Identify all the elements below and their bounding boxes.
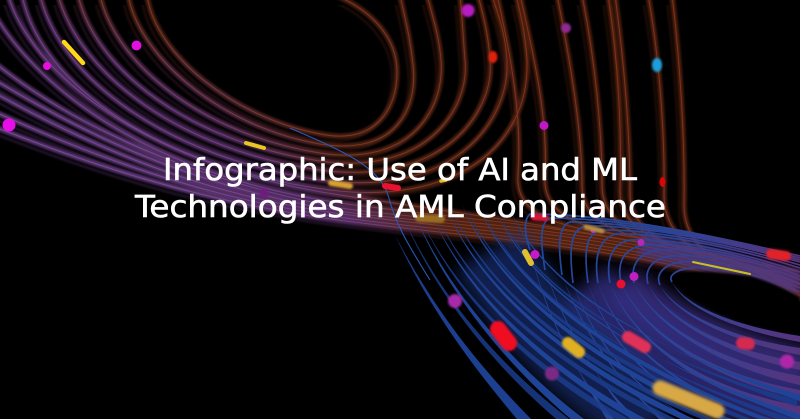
title: Technologies in AML Compliance bbox=[134, 190, 666, 225]
red and blue streaks bbox=[385, 51, 786, 347]
lower swirl: blue streams bbox=[290, 128, 800, 419]
yellow streaks bbox=[64, 42, 750, 411]
title: Infographic: Use of AI and ML bbox=[163, 153, 637, 188]
title bbox=[134, 153, 666, 225]
upper swirl: brown and purple streams bbox=[0, 0, 800, 305]
hole of the lower swirl bbox=[670, 271, 800, 334]
